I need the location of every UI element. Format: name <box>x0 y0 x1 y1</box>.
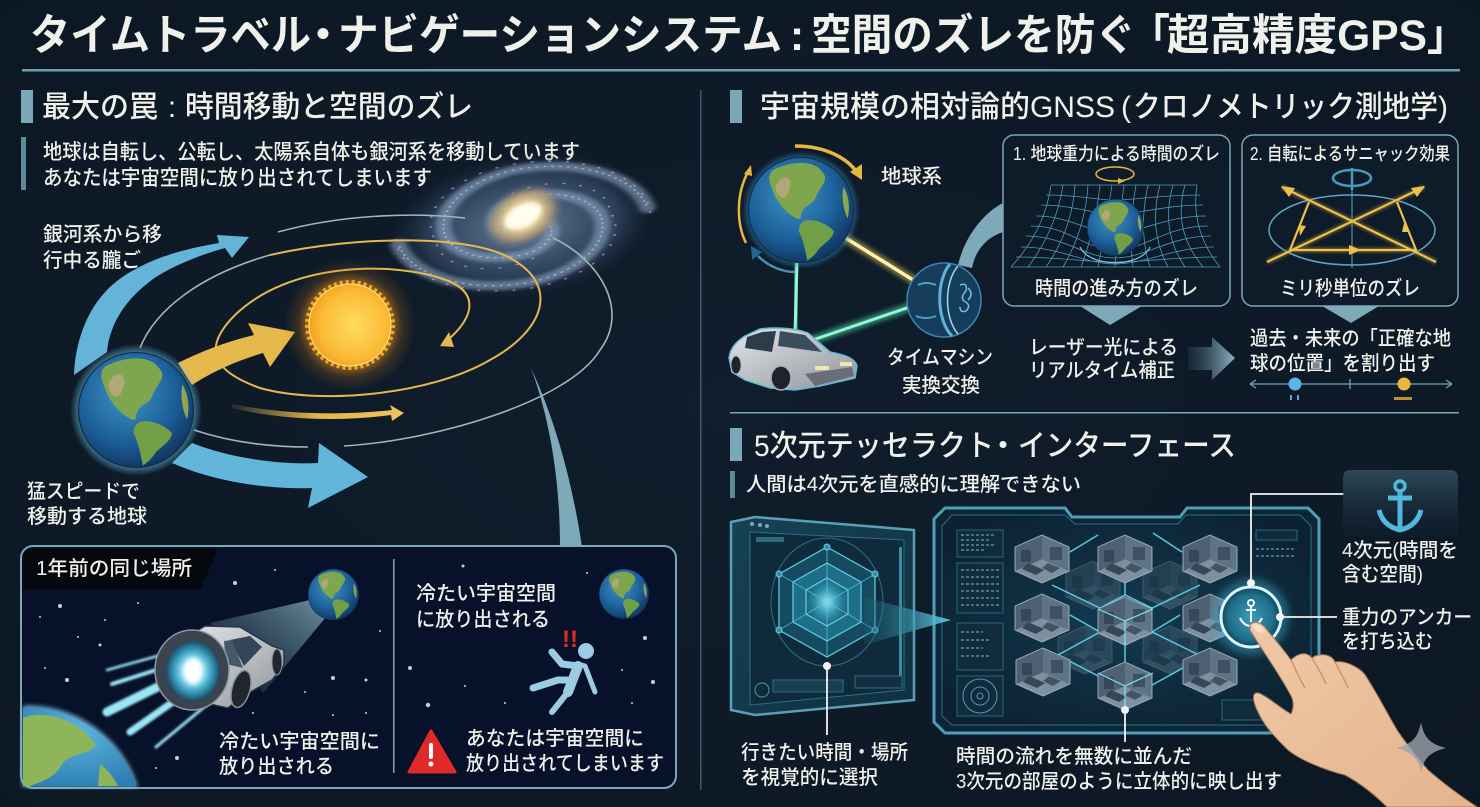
title: 超高精度GPS <box>1167 12 1427 60</box>
text block: laser correction: レーザー光による <box>1029 336 1178 359</box>
beam from earth to car <box>210 600 326 693</box>
callout: three-dimensional rooms: 3次元の部屋のように立体的に映し出す <box>956 770 1282 793</box>
illustration: sun <box>284 259 416 391</box>
panel: gravity time shift: 1. 地球重力による時間のズレ <box>1013 143 1220 164</box>
text block: exact earth position: 過去・未来の「正確な地 <box>1250 327 1451 350</box>
label: warning: あなたは宇宙空間に <box>466 727 644 750</box>
callout: anchor box: 含む空間) <box>1342 563 1423 586</box>
illustration: big earth corner <box>22 705 138 787</box>
panel: one year ago <box>21 546 676 788</box>
illustration: satellite device <box>907 263 981 337</box>
text block: intro: 地球は自転し、公転し、太陽系自体も銀河系を移動しています <box>43 141 580 164</box>
arrow: blue large <box>172 443 368 508</box>
callout: gravity anchor: 重力のアンカー <box>1342 606 1472 629</box>
illustration: earth <box>70 344 202 476</box>
callout tail to panel <box>531 368 582 547</box>
callout: three-dimensional rooms <box>956 706 1282 793</box>
text block: laser correction <box>1029 336 1178 382</box>
label: cold space right: 冷たい宇宙空間 <box>416 582 556 605</box>
callout: select time and place: を視覚的に選択 <box>741 766 878 789</box>
panel: Sagnac effect <box>1242 135 1458 306</box>
title: 」 <box>1427 12 1467 60</box>
text block: intro <box>21 137 580 190</box>
label: fast earth: 移動する地球 <box>27 505 147 528</box>
arrow: yellow toward sun <box>178 323 295 385</box>
heading: left section: 最大の罠 <box>42 91 158 124</box>
title: : <box>790 12 804 60</box>
label: warning <box>466 727 664 775</box>
text block: exact earth position: 球の位置」を割り出す <box>1250 352 1435 375</box>
arrow: pointer under box 1 <box>1080 306 1142 325</box>
heading: GNSS: ) <box>1438 91 1448 124</box>
title: ナビゲーションシステム <box>338 12 782 60</box>
panel: Sagnac effect: ミリ秒単位のズレ <box>1280 277 1420 300</box>
text block: intro: あなたは宇宙空間に放り出されてしまいます <box>43 167 432 190</box>
callout: gravity anchor <box>1276 606 1472 653</box>
label: earth system: 地球系 <box>881 165 942 188</box>
callout: gravity anchor: を打ち込む <box>1342 630 1433 653</box>
panel: gravity time shift: 時間の進み方のズレ <box>1035 277 1198 300</box>
title: ・ <box>302 12 344 60</box>
icon: rotation blue <box>1333 168 1371 190</box>
icon: rotation ring <box>1096 167 1134 184</box>
illustration: galaxy core <box>470 169 576 263</box>
panel: gravity time shift <box>1003 135 1230 306</box>
heading: GNSS: 宇宙規模の相対論的GNSS <box>760 91 1115 124</box>
heading: left section: : <box>168 91 176 124</box>
heading: GNSS: クロノメトリック測地学 <box>1133 91 1438 124</box>
illustration: small earth right <box>599 569 649 619</box>
illustration: pointing hand <box>1250 622 1477 807</box>
diagram: Sagnac light paths <box>1267 186 1436 268</box>
panel: cosmic GNSS <box>729 90 1458 400</box>
label: time machine: タイムマシン <box>887 346 993 369</box>
title: 「 <box>1130 12 1170 60</box>
data side panels <box>957 530 1297 720</box>
illustration: time machine car with engine <box>107 626 284 747</box>
illustration: DeLorean car <box>729 328 857 390</box>
label: time machine: 実換交換 <box>902 374 980 397</box>
label: cold space right: に放り出される <box>416 608 550 631</box>
panel: selector screen <box>731 517 914 715</box>
text block: human limit: 人間は4次元を直感的に理解できない <box>746 472 1081 496</box>
panel: left section, the biggest trap <box>21 90 676 788</box>
callout: three-dimensional rooms: 時間の流れを無数に並んだ <box>956 745 1192 768</box>
icon: falling person: !! <box>562 626 578 653</box>
icon: falling person <box>533 626 595 712</box>
title: 空間のズレを防ぐ <box>811 12 1136 60</box>
heading: tesseract: インターフェース <box>1018 430 1236 463</box>
chart: hexagon radar <box>771 538 883 666</box>
illustration: small earth left <box>308 569 359 620</box>
label: fast earth <box>27 480 147 528</box>
illustration: earth in well <box>1087 199 1144 256</box>
text block: laser correction: リアルタイム補正 <box>1029 359 1175 382</box>
stars <box>39 564 655 769</box>
label: cold space left: 冷たい宇宙空間に <box>219 730 380 753</box>
label: cold space right <box>416 582 556 631</box>
heading: left section: 時間移動と空間のズレ <box>185 91 473 124</box>
beam from selector to display <box>864 597 951 645</box>
isometric rooms grid <box>1015 535 1237 710</box>
panel: Sagnac effect: 2. 自転によるサニャック効果 <box>1250 144 1450 164</box>
label: warning: 放り出されてしまいます <box>466 752 664 775</box>
heading: GNSS <box>730 90 1448 124</box>
icon: anchor <box>1379 481 1421 530</box>
panel: main holographic display <box>934 508 1319 733</box>
label: galaxy motion: 行中る朧ご <box>43 249 141 272</box>
title: タイムトラベル <box>30 12 311 60</box>
chart: timeline <box>1250 378 1452 400</box>
callout: anchor box: 4次元(時間を <box>1342 539 1458 562</box>
laser beams <box>795 237 936 343</box>
heading: GNSS: ( <box>1121 91 1131 124</box>
callout: select time and place <box>741 662 908 789</box>
title <box>22 12 1467 72</box>
text block: exact earth position <box>1250 327 1451 375</box>
heading: tesseract <box>730 428 1236 463</box>
label: fast earth: 猛スピードで <box>27 480 140 503</box>
arrow: pointer under box 2 <box>1322 306 1379 323</box>
illustration: earth with rotation arrows <box>739 146 862 272</box>
panel: 5D tesseract interface <box>730 428 1477 807</box>
connector from device to box <box>958 203 1003 268</box>
icon: warning triangle <box>409 731 455 772</box>
tab: one year ago label: 1年前の同じ場所 <box>36 557 192 580</box>
heading: tesseract: ・ <box>988 430 1018 463</box>
label: time machine <box>887 346 993 397</box>
orbit lines <box>140 215 612 447</box>
heading: left section <box>21 90 473 124</box>
illustration: spiral galaxy <box>380 136 666 316</box>
arrow: blue sweep toward galaxy <box>74 235 249 375</box>
arrow: laser to position <box>1188 337 1235 380</box>
label: galaxy motion: 銀河系から移 <box>43 223 162 246</box>
arrow: small yellow <box>232 404 404 421</box>
label: cold space left <box>219 730 380 778</box>
label: cold space left: 放り出される <box>219 755 334 778</box>
label: galaxy motion <box>43 223 162 272</box>
callout: anchor box <box>1247 470 1458 587</box>
dim rooms <box>1058 561 1197 674</box>
network lines between rooms <box>1052 533 1203 685</box>
heading: tesseract: 5次元テッセラクト <box>754 430 994 463</box>
callout: select time and place: 行きたい時間・場所 <box>741 741 908 764</box>
chart: warped spacetime grid <box>1011 185 1220 267</box>
icon: sparkle watermark <box>1396 722 1446 772</box>
tab: one year ago label <box>23 549 218 590</box>
icon: gravity anchor target <box>1213 579 1289 655</box>
